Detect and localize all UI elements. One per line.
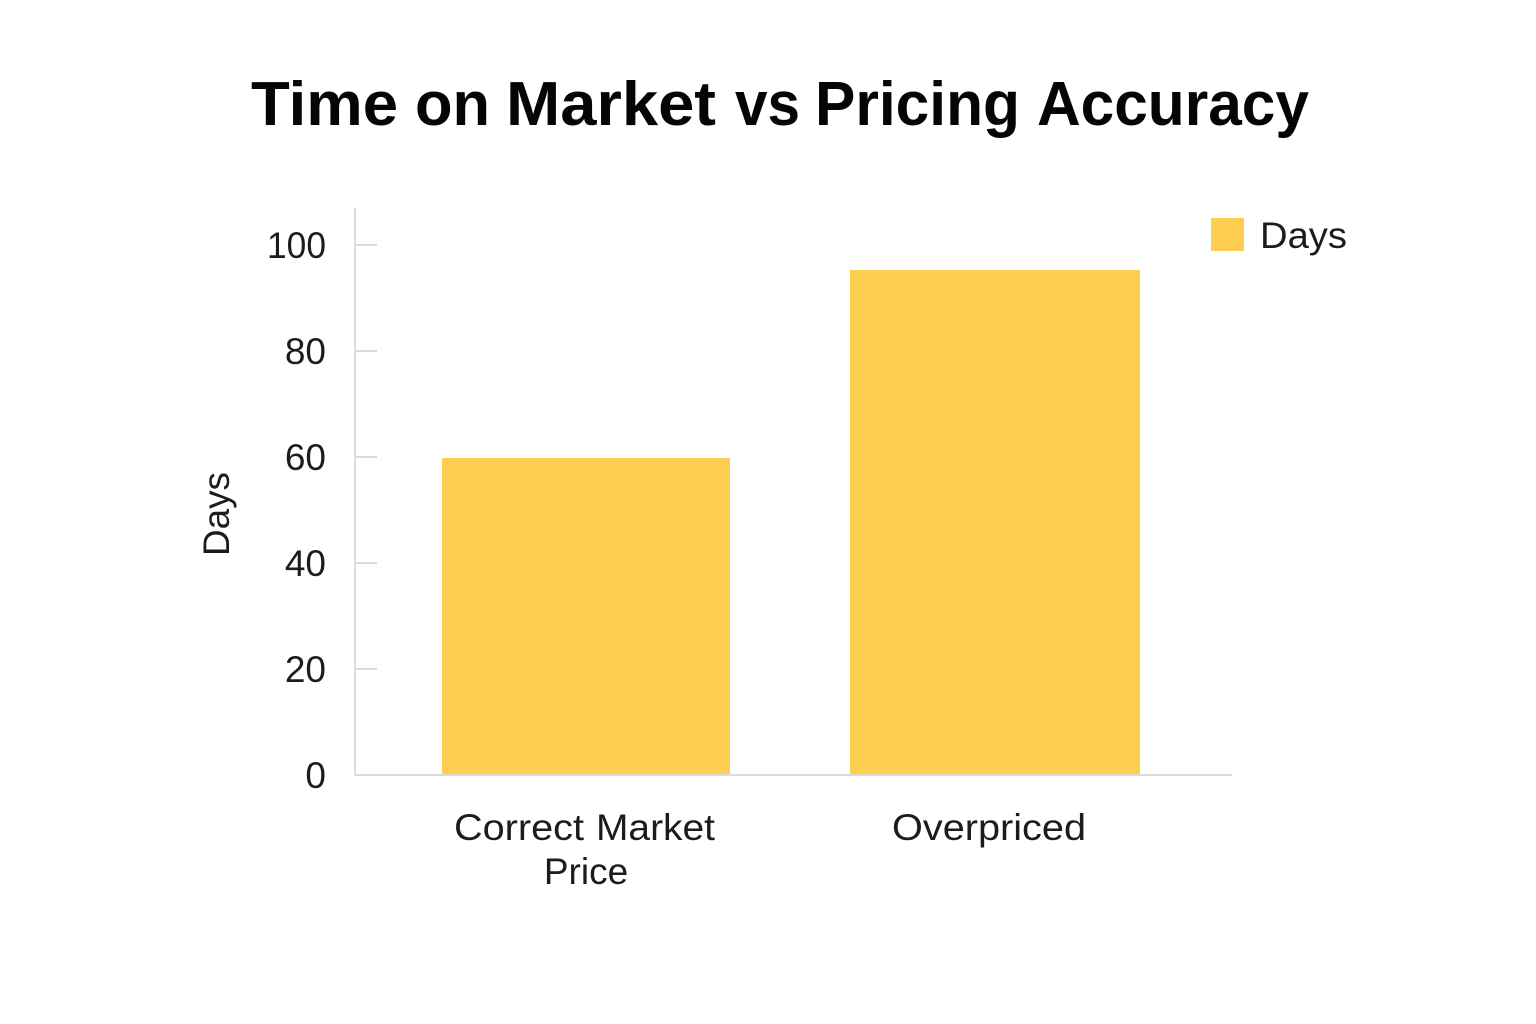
title: on xyxy=(415,70,490,139)
title: vs xyxy=(735,70,800,139)
y-axis tick labels xyxy=(267,225,326,796)
axes xyxy=(355,208,1232,775)
bar chart xyxy=(196,208,1232,892)
bar: Correct Market Price xyxy=(442,458,730,774)
y-axis title: Days xyxy=(196,472,237,556)
legend label: Days xyxy=(1260,215,1347,256)
title: Pricing xyxy=(815,70,1020,139)
bar: Overpriced xyxy=(850,270,1140,774)
legend xyxy=(1211,215,1347,256)
y-axis tick labels: 100 xyxy=(267,225,326,266)
y-axis tick labels: 20 xyxy=(285,649,326,690)
y-axis tick labels: 40 xyxy=(285,543,326,584)
x-axis label: Correct Market: Correct xyxy=(454,807,585,848)
y-axis tick labels: 0 xyxy=(305,755,326,796)
x-axis label: Correct Market: Market xyxy=(596,807,716,848)
y-axis tick labels: 80 xyxy=(285,331,326,372)
title: Time xyxy=(251,70,398,139)
legend swatch xyxy=(1211,218,1244,251)
x-axis label: Overpriced: Overpriced xyxy=(892,807,1086,848)
title: Market xyxy=(506,70,716,139)
x-axis label: Price: Price xyxy=(544,851,628,892)
title: Accuracy xyxy=(1037,70,1309,139)
y-axis tick labels: 60 xyxy=(285,437,326,478)
